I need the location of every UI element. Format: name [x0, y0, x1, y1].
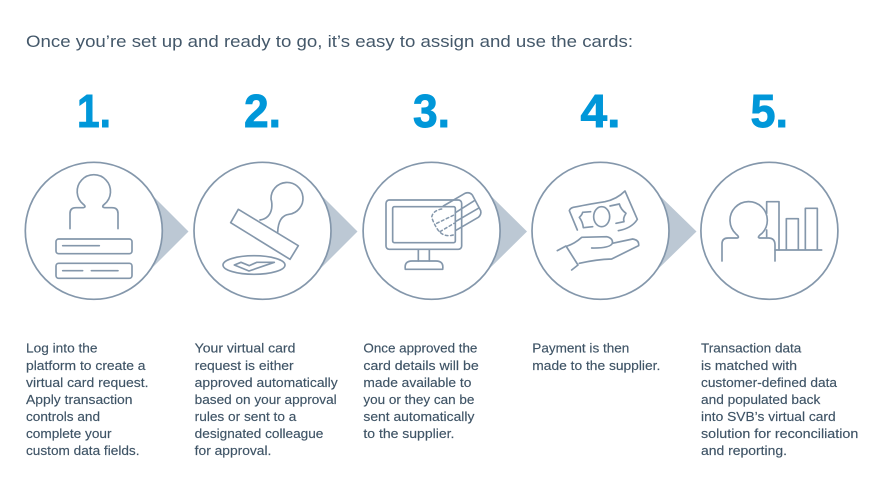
- text: step 3 description: Once approved the: [363, 342, 477, 356]
- text: step 1 description: virtual card request.: [26, 376, 148, 390]
- icon: approval stamp: [223, 182, 303, 274]
- circle: step 2: [194, 162, 331, 299]
- text: step 3 description: to the supplier.: [363, 427, 454, 441]
- step number 4: 4.: [580, 85, 620, 137]
- step number 1: 1.: [77, 85, 111, 137]
- text: step 3 description: [363, 342, 479, 441]
- circle: step 1: [25, 162, 162, 299]
- arrow: step 2 to 3: [319, 193, 358, 270]
- step number 2: 2.: [244, 85, 281, 137]
- text: step 5 description: customer-defined data: [701, 376, 837, 390]
- text: step 3 description: you or they can be: [363, 393, 474, 407]
- text: step 1 description: [26, 342, 148, 458]
- text: step 2 description: for approval.: [195, 444, 271, 458]
- text: step 1 description: controls and: [26, 410, 100, 424]
- text: step 3 description: card details will be: [363, 359, 479, 373]
- text: step 2 description: approved automatically: [195, 376, 338, 390]
- step number 5: 5.: [750, 85, 788, 137]
- text: step 5 description: solution for reconciliation: [701, 427, 858, 441]
- text: step 1 description: platform to create a: [26, 359, 146, 373]
- icon: hand receiving money: [557, 191, 639, 270]
- text: step 4 description: Payment is then: [532, 342, 629, 356]
- text: step 5 description: into SVB’s virtual card: [701, 410, 836, 424]
- text: step 3 description: made available to: [363, 376, 471, 390]
- text: step 1 description: custom data fields.: [26, 444, 140, 458]
- text: step 4 description: made to the supplier.: [532, 359, 660, 373]
- text: step 1 description: Log into the: [26, 342, 98, 356]
- text: step 5 description: [701, 342, 858, 458]
- text: step 2 description: Your virtual card: [195, 342, 295, 356]
- text: step 2 description: rules or sent to a: [195, 410, 296, 424]
- text: step 1 description: complete your: [26, 427, 112, 441]
- circle: step 4: [532, 162, 669, 299]
- icon: person with form fields: [56, 175, 132, 278]
- icon: person with bar chart: [722, 202, 822, 261]
- text: step 5 description: and populated back: [701, 393, 821, 407]
- icon: monitor with card: [386, 193, 481, 269]
- text: step 5 description: Transaction data: [701, 342, 801, 356]
- arrow: step 3 to 4: [488, 193, 527, 270]
- text: step 2 description: [195, 342, 338, 458]
- step number 3: 3.: [413, 85, 450, 137]
- text: step 2 description: based on your approval: [195, 393, 337, 407]
- circle: step 3: [363, 162, 500, 299]
- text: step 4 description: [532, 342, 660, 373]
- text: step 5 description: and reporting.: [701, 444, 787, 458]
- text: step 3 description: sent automatically: [363, 410, 475, 424]
- title: Once you’re set up and ready to go, it’s easy to assign and use the cards:: [26, 32, 633, 51]
- circle: step 5: [701, 162, 838, 299]
- arrow: step 1 to 2: [150, 193, 188, 270]
- text: step 2 description: designated colleague: [195, 427, 323, 441]
- text: step 1 description: Apply transaction: [26, 393, 132, 407]
- arrow: step 4 to 5: [657, 193, 696, 270]
- text: step 5 description: is matched with: [701, 359, 797, 373]
- text: step 2 description: request is either: [195, 359, 294, 373]
